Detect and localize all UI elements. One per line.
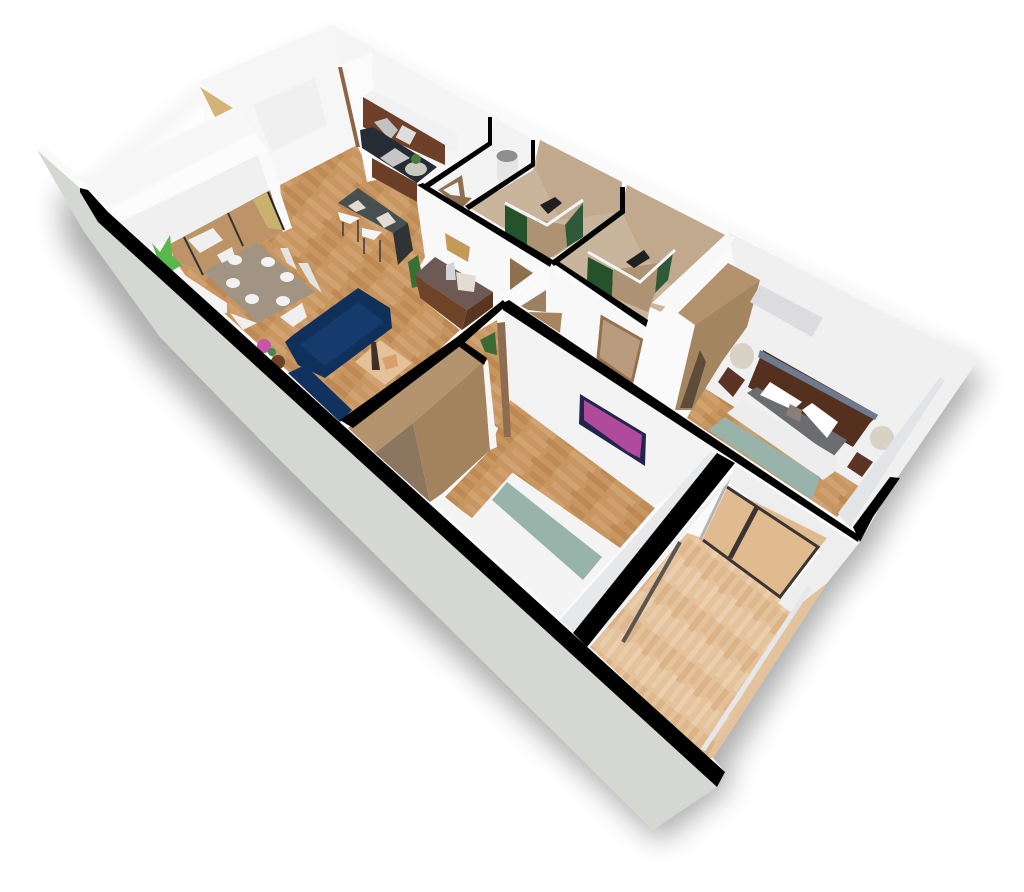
kitchen wall and column (332, 25, 495, 182)
kitchen island with stools (338, 188, 413, 265)
second bedroom floor (445, 400, 655, 548)
hallway floor and plant behind the door (462, 320, 510, 437)
right strip of second bedroom (560, 452, 722, 632)
window on the right wall (838, 377, 945, 527)
wall-mounted TV (579, 394, 646, 466)
terrace floor (590, 533, 790, 758)
door beside the wardrobe (497, 322, 511, 437)
master bed (708, 350, 878, 500)
air conditioner (750, 285, 823, 337)
master bedroom floor (687, 387, 860, 517)
sideboard with lamp and plant (408, 255, 493, 330)
thick black walls (80, 117, 900, 787)
second bed (432, 473, 620, 617)
bedside tables and lamps (718, 343, 894, 477)
living room back wall with blind (198, 25, 357, 185)
partition wall with mirror and door (417, 187, 543, 300)
window wall and curtain (82, 108, 292, 275)
dining table and chairs (203, 243, 322, 330)
blue sofa (285, 288, 392, 422)
kitchen cabinets and counter (360, 90, 458, 202)
bedroom wardrobe (348, 345, 497, 502)
terrace wall and sliding doors (587, 465, 857, 758)
hallway wall, doors (507, 270, 647, 382)
icon: potted plant (152, 235, 182, 272)
bathroom two (555, 185, 725, 325)
laundry room (427, 117, 533, 207)
master bedroom back wall (703, 232, 978, 527)
white bench along the window (175, 270, 227, 313)
flowers in a basket (257, 339, 285, 369)
second bedroom wall (503, 308, 722, 508)
master bedroom wardrobe (675, 263, 760, 410)
outer grey wall (37, 150, 717, 830)
coffee table (355, 340, 412, 385)
white pillar beside the wardrobe (634, 235, 735, 407)
bathroom one (470, 140, 622, 258)
living room floor (176, 145, 460, 425)
